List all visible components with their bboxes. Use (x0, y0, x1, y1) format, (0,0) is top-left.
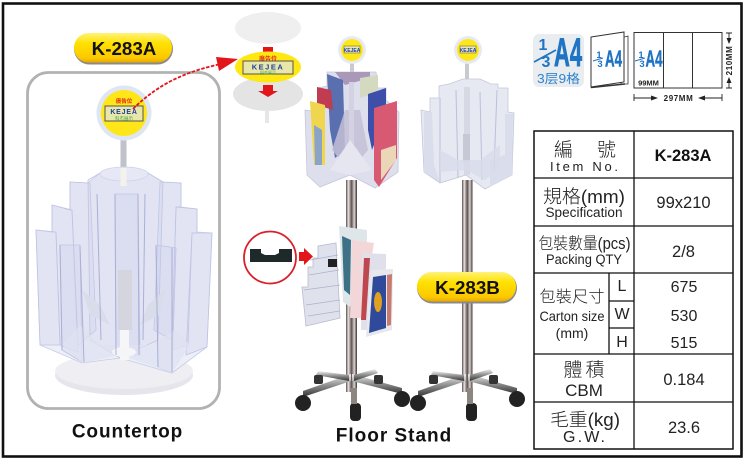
row: carton size: L (618, 278, 627, 295)
lower holder with brochures (302, 226, 393, 337)
icon: 1/3 A4 3 tiers 9 slots: 3层9格 (537, 71, 581, 86)
diagram: tri-fold A4 dimensions: A4 (646, 46, 663, 72)
label: Floor Stand: Floor Stand (336, 426, 452, 446)
icon: 1/3 A4 3 tiers 9 slots: 1 (539, 37, 548, 54)
dimension: 210MM: 210MM (725, 46, 734, 75)
badge: K-283B: K-283B (435, 277, 500, 298)
row: gross weight: 毛重(kg) (550, 410, 620, 430)
row: item number: Item No. (550, 159, 618, 174)
row: specification: 規格(mm) (543, 186, 625, 207)
row: specification: 99x210 (656, 194, 711, 212)
row: packing quantity: 包裝數量(pcs) (538, 234, 630, 253)
icon: countertop sign: 科杰展示 (115, 115, 133, 122)
row: carton size: 包裝尺寸 (540, 288, 604, 306)
illustration: exploded sign assembly (233, 12, 303, 123)
row: carton size: 530 (671, 308, 697, 325)
badge: K-283A: K-283A (92, 38, 157, 59)
icon: 1/3 A4 3 tiers 9 slots: A4 (554, 31, 582, 75)
diagram: tri-fold A4 dimensions (634, 32, 734, 103)
top sign: KEJEA (460, 48, 477, 54)
dimension: 297MM: 297MM (664, 94, 693, 103)
table: specifications (534, 131, 733, 449)
top sign (338, 36, 366, 82)
diagram: tri-fold A4 dimensions: 1 (638, 50, 644, 61)
row: carton size: 675 (671, 279, 697, 296)
arrow: dashed callout to sign (133, 57, 238, 109)
pole (462, 180, 472, 392)
icon: 1/3 A4 3 tiers 9 slots (533, 31, 584, 87)
row: carton size: 515 (671, 335, 697, 352)
row: gross weight (550, 410, 700, 446)
icon: countertop sign: 廣告位 (116, 97, 133, 105)
row: volume: 體積 (564, 359, 604, 381)
panel: countertop product (28, 72, 220, 408)
label: Countertop: Countertop (72, 422, 183, 442)
icon: folded 1/3 A4 leaflet: 1 (596, 50, 602, 61)
row: item number: 編 號 (554, 139, 616, 161)
icon: folded 1/3 A4 leaflet (591, 32, 628, 88)
callout: clip detail (244, 232, 313, 284)
illustration: countertop acrylic holder (36, 167, 212, 395)
illustration: exploded sign assembly: KEJEA (252, 62, 284, 72)
row: carton size (540, 278, 697, 352)
row: packing quantity: Packing QTY (546, 252, 622, 267)
row: carton size: W (614, 306, 630, 323)
pole (346, 180, 357, 392)
row: packing quantity: 2/8 (672, 243, 695, 261)
row: volume: 0.184 (663, 371, 705, 389)
diagram: tri-fold A4 dimensions: 3 (639, 59, 645, 70)
upper holder with brochures (305, 72, 399, 188)
badge: K-283B (417, 272, 517, 304)
row: volume: CBM (565, 381, 603, 400)
row: specification: Specification (546, 205, 622, 220)
top sign (454, 36, 482, 82)
clear holder (421, 79, 514, 189)
row: gross weight: 23.6 (668, 419, 700, 437)
icon: folded 1/3 A4 leaflet: 3 (597, 59, 603, 70)
wheel base (295, 369, 410, 421)
row: carton size: (mm) (556, 325, 588, 341)
row: packing quantity (538, 234, 695, 267)
row: item number: K-283A (655, 147, 712, 165)
icon: folded 1/3 A4 leaflet: A4 (605, 46, 622, 72)
icon: 1/3 A4 3 tiers 9 slots: 3 (542, 54, 551, 71)
illustration: exploded sign assembly: 科杰展示 (260, 69, 276, 75)
badge: K-283A (74, 33, 173, 64)
diagram: tri-fold A4 dimensions: 99MM (638, 78, 659, 88)
wheel base (410, 369, 525, 421)
row: gross weight: G.W. (563, 429, 605, 446)
row: carton size: H (616, 334, 628, 351)
illustration: floor stand empty (410, 36, 525, 421)
row: volume (564, 359, 705, 400)
top sign: KEJEA (344, 48, 361, 54)
row: item number (550, 139, 712, 174)
illustration: exploded sign assembly: 廣告位 (259, 55, 277, 63)
row: specification (543, 186, 711, 220)
row: carton size: Carton size (540, 308, 605, 324)
illustration: floor stand loaded (295, 36, 410, 421)
icon: countertop sign (96, 86, 152, 170)
icon: countertop sign: KEJEA (110, 109, 138, 116)
